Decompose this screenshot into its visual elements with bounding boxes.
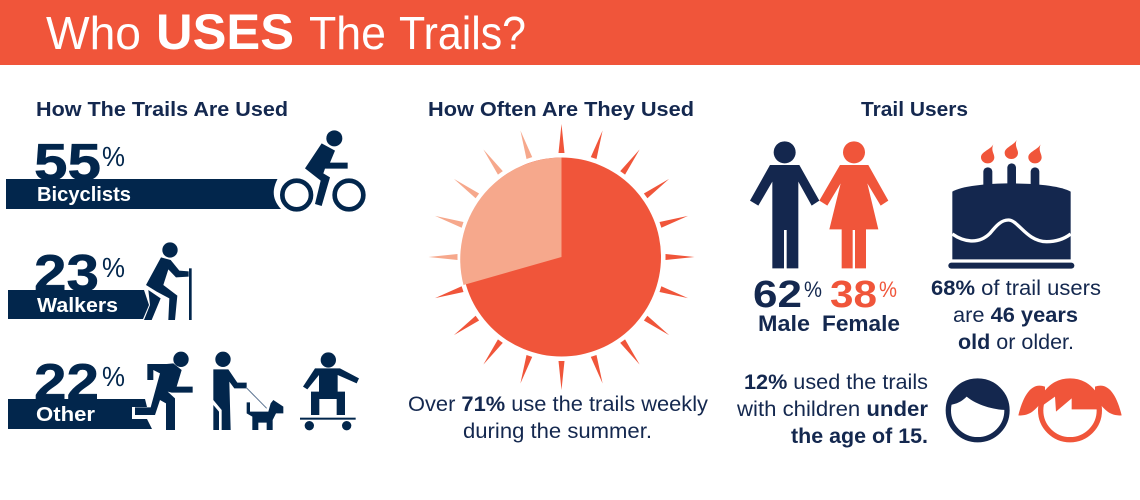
title: Who bbox=[46, 7, 141, 59]
heading: Trail Users bbox=[861, 99, 968, 121]
icon: birthday cake bbox=[948, 140, 1074, 269]
stat: male 62% bbox=[753, 274, 822, 336]
title: The bbox=[309, 7, 386, 59]
stat: female 38%: 38 bbox=[830, 274, 877, 316]
icon: skateboarder bbox=[300, 352, 359, 430]
stat: other 22%: % bbox=[102, 361, 125, 392]
panel: how often are they used bbox=[408, 99, 709, 443]
icon: girl face bbox=[1018, 380, 1122, 440]
stat: bicyclists 55%: 55 bbox=[34, 134, 101, 192]
stat: male 62%: % bbox=[804, 277, 822, 302]
panel: how the trails are used bbox=[6, 99, 363, 430]
heading: How Often Are They Used bbox=[428, 99, 694, 121]
text: age stat: 68% of trail users bbox=[931, 277, 1095, 300]
panel: trail users bbox=[736, 99, 1122, 448]
icon: woman bbox=[819, 141, 888, 268]
stat: walkers 23%: Walkers bbox=[37, 295, 118, 317]
icon: boy face bbox=[948, 380, 1007, 440]
stat: other 22%: 22 bbox=[34, 354, 99, 412]
stat: walkers 23% bbox=[8, 245, 149, 319]
text: children stat: the age of 15. bbox=[791, 425, 928, 448]
title: USES bbox=[156, 4, 294, 60]
heading: How The Trails Are Used bbox=[36, 99, 288, 121]
sun rays bbox=[428, 124, 694, 390]
text: children stat: with children under bbox=[737, 398, 925, 421]
stat: female 38%: Female bbox=[822, 311, 900, 336]
icon: cyclist bbox=[282, 130, 363, 209]
icon: man bbox=[750, 141, 819, 268]
text: age stat: are 46 years bbox=[953, 304, 1075, 327]
icon: runner bbox=[135, 352, 193, 430]
stat: male 62%: Male bbox=[758, 311, 810, 336]
text: children stat: 12% used the trails bbox=[744, 371, 924, 394]
stat: bicyclists 55%: Bicyclists bbox=[37, 184, 131, 206]
pie chart: 71% weekly bbox=[460, 158, 661, 356]
caption: during the summer. bbox=[463, 420, 652, 443]
stat: female 38%: % bbox=[879, 277, 897, 302]
caption: Over 71% use the trails weekly bbox=[408, 393, 700, 416]
text: age stat: old or older. bbox=[958, 331, 1072, 354]
stat: other 22% bbox=[8, 354, 152, 429]
stat: bicyclists 55%: % bbox=[102, 141, 125, 172]
icon: walker with cane bbox=[144, 242, 192, 320]
title: Trails? bbox=[399, 7, 526, 59]
icon: person walking dog bbox=[213, 352, 283, 430]
stat: bicyclists 55% bbox=[6, 134, 281, 209]
stat: other 22%: Other bbox=[36, 404, 95, 426]
stat: female 38% bbox=[822, 274, 900, 336]
stat: walkers 23%: 23 bbox=[34, 245, 99, 303]
stat: male 62%: 62 bbox=[753, 274, 802, 316]
header banner bbox=[0, 0, 1140, 65]
stat: walkers 23%: % bbox=[102, 252, 125, 283]
